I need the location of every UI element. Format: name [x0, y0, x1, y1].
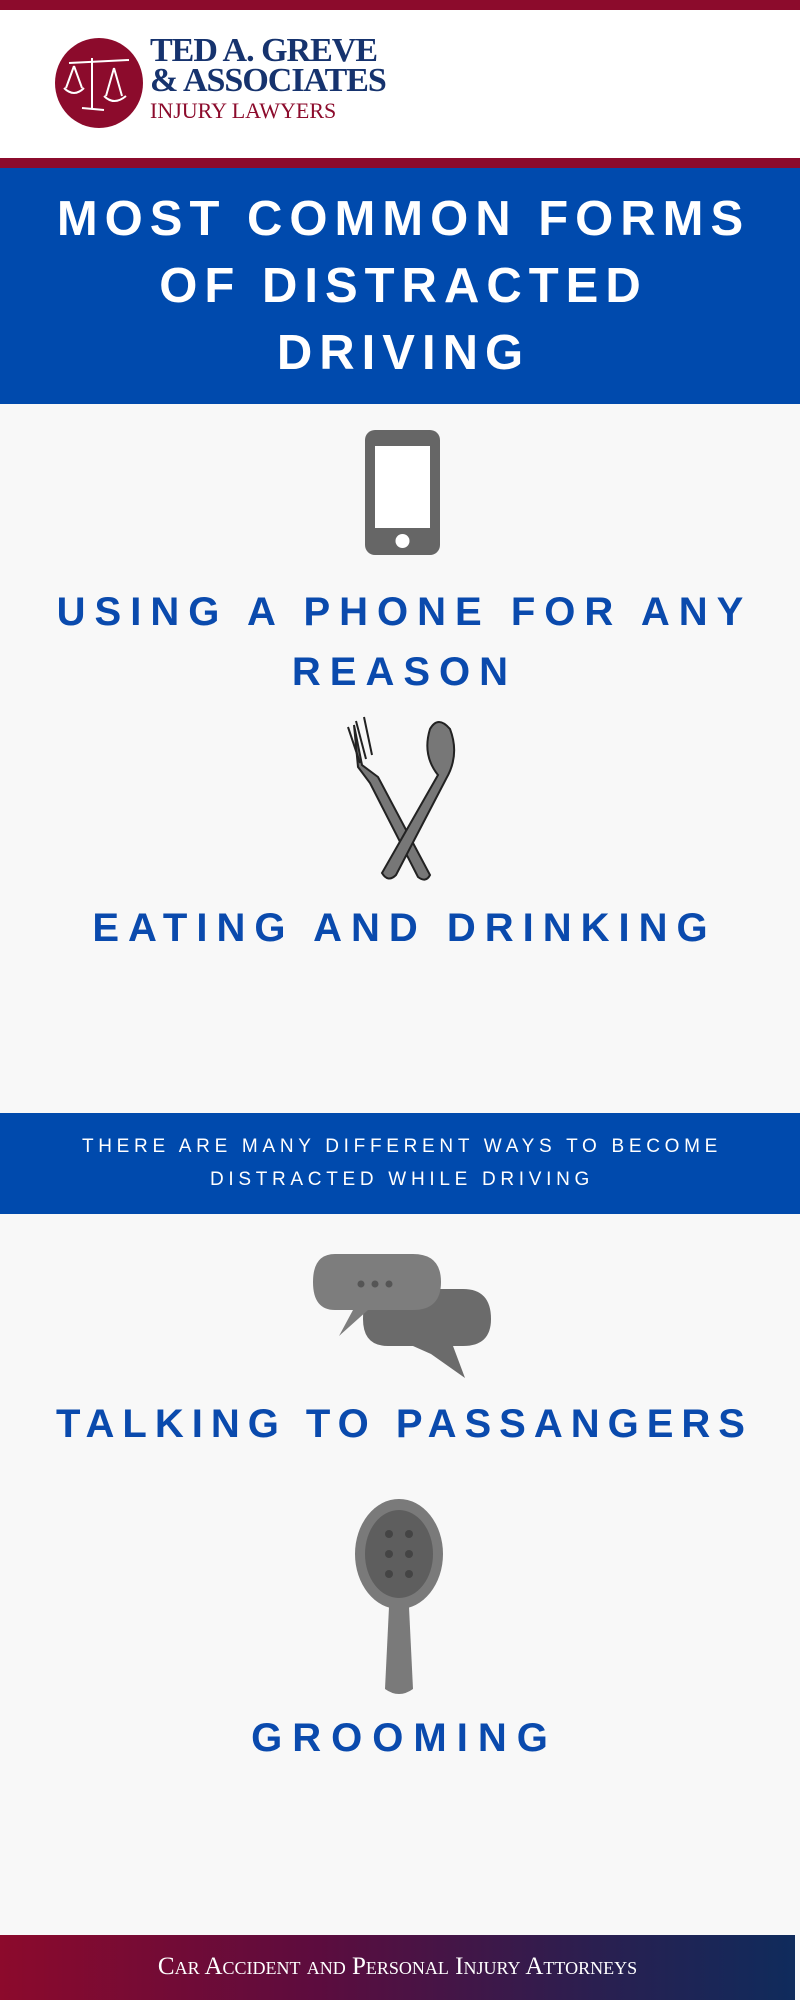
header: logo: [0, 10, 800, 158]
footer text: Car Accident and Personal Injury Attorneys: [158, 1953, 637, 1980]
title: DRIVING: [277, 326, 530, 380]
logo text: [150, 32, 386, 123]
heading: talking: TALKING TO PASSANGERS: [56, 1402, 753, 1446]
banner text: DISTRACTED WHILE DRIVING: [210, 1169, 594, 1190]
icon: phone: [365, 430, 440, 555]
icon: chat bubbles: [313, 1254, 491, 1378]
heading: phone: USING A PHONE FOR ANY: [57, 590, 752, 634]
title: [57, 192, 750, 380]
heading: grooming: GROOMING: [251, 1716, 558, 1760]
icon: scales of justice circle: [55, 38, 143, 128]
icon: hairbrush: [355, 1499, 443, 1694]
title: OF DISTRACTED: [159, 259, 648, 313]
title: MOST COMMON FORMS: [57, 192, 750, 246]
icon: fork and spoon: [347, 716, 456, 881]
red divider bar: [0, 158, 800, 168]
logo text: & ASSOCIATES: [150, 62, 386, 99]
logo text: TED A. GREVE: [150, 32, 377, 69]
heading: phone: REASON: [292, 650, 517, 694]
title band: [0, 168, 800, 404]
heading: eating: EATING AND DRINKING: [92, 906, 717, 950]
banner text: THERE ARE MANY DIFFERENT WAYS TO BECOME: [82, 1136, 722, 1157]
heading: phone: [57, 590, 752, 694]
logo text: INJURY LAWYERS: [150, 98, 336, 123]
banner: [0, 1113, 800, 1214]
top red bar: [0, 0, 800, 10]
footer: [0, 1935, 795, 2000]
banner text: [82, 1136, 722, 1190]
